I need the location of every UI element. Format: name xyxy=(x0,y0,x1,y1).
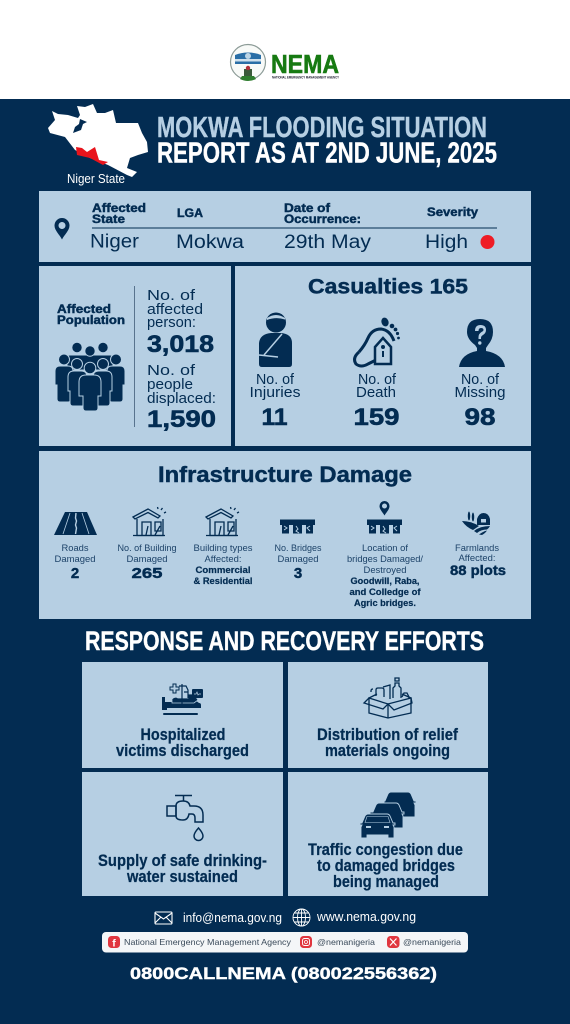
icon: crowd xyxy=(55,342,125,411)
missing label: No. of xyxy=(461,372,500,388)
farmlands text xyxy=(450,543,506,578)
panel: safe drinking water xyxy=(82,772,283,896)
infrastructure heading: Infrastructure Damage xyxy=(158,462,412,487)
bridges text: 3 xyxy=(294,565,302,582)
injuries number: 11 xyxy=(262,404,288,431)
displaced number: 1,590 xyxy=(147,406,216,433)
bridge location text: Agric bridges. xyxy=(354,598,416,608)
column headers: Affected xyxy=(92,203,146,215)
panel: relief materials xyxy=(288,662,488,768)
bridges text: Damaged xyxy=(278,554,318,564)
icon: relief box xyxy=(364,678,412,718)
panel: hospitalized victims xyxy=(82,662,283,768)
relief text xyxy=(317,725,458,760)
contacts row xyxy=(155,909,416,926)
affected persons number: 3,018 xyxy=(147,331,214,358)
building types text: & Residential xyxy=(194,576,252,586)
missing number: 98 xyxy=(464,404,496,431)
affected persons label: No. of xyxy=(147,287,196,304)
column headers xyxy=(92,203,479,226)
column headers: Severity xyxy=(427,207,479,219)
buildings text: 265 xyxy=(132,565,162,582)
icon: envelope xyxy=(155,912,172,924)
affected persons label: person: xyxy=(147,314,196,331)
panel: traffic congestion xyxy=(288,772,488,896)
traffic text: Traffic congestion due xyxy=(308,840,463,859)
injuries label: No. of xyxy=(256,372,295,388)
traffic text: being managed xyxy=(333,872,439,891)
email: info@nema.gov.ng xyxy=(183,911,282,925)
instagram handle: @nemanigeria xyxy=(317,937,375,947)
column headers: State xyxy=(92,214,125,226)
affected persons label: affected xyxy=(147,301,203,318)
drinking water text: water sustained xyxy=(126,867,238,886)
displaced label xyxy=(147,362,216,407)
farmlands text: Farmlands xyxy=(455,543,499,553)
divider xyxy=(134,286,135,427)
displaced label: displaced: xyxy=(147,390,216,407)
icon: X xyxy=(387,936,400,948)
buildings text: No. of Building xyxy=(118,543,176,553)
affected persons label xyxy=(147,287,203,331)
affected population heading xyxy=(57,304,125,327)
displaced label: No. of xyxy=(147,362,196,379)
icon: water tap xyxy=(167,796,203,841)
icon: damaged building type xyxy=(206,507,239,536)
column values: Mokwa xyxy=(176,232,244,253)
icon: missing person xyxy=(459,319,505,367)
missing label: Missing xyxy=(454,385,506,401)
website: www.nema.gov.ng xyxy=(316,910,416,924)
icon: cars in traffic xyxy=(360,792,416,838)
icon: hospital bed xyxy=(162,684,203,715)
building types text: Building types xyxy=(194,543,253,553)
hospitalized text: Hospitalized xyxy=(140,725,226,744)
icon: damaged building xyxy=(133,507,166,536)
column headers: Date of xyxy=(284,203,330,215)
death label xyxy=(356,372,397,401)
NEMA logo xyxy=(230,44,339,81)
column headers: LGA xyxy=(177,208,203,220)
map label: Niger State xyxy=(67,172,125,186)
logo emblem xyxy=(230,44,266,81)
injuries label: Injuries xyxy=(250,385,300,401)
roads text xyxy=(54,543,96,582)
bridge location text: bridges Damaged/ xyxy=(347,554,423,564)
traffic text xyxy=(308,840,463,891)
injuries label xyxy=(250,372,300,401)
roads text: Roads xyxy=(62,543,89,553)
icon: facebook: f xyxy=(112,938,116,950)
hospitalized text xyxy=(116,725,249,760)
icon: globe xyxy=(293,909,310,926)
header rule xyxy=(92,228,497,229)
social media bar xyxy=(102,932,468,952)
panel: infrastructure damage xyxy=(39,451,531,619)
phone hotline: 0800CALLNEMA (080022556362) xyxy=(130,964,437,983)
panel: incident summary xyxy=(39,191,531,262)
agency small line: NATIONAL EMERGENCY MANAGEMENT AGENCY xyxy=(272,76,339,80)
icon: instagram xyxy=(300,936,312,948)
building types text: Commercial xyxy=(196,565,250,575)
X handle: @nemanigeria xyxy=(403,937,461,947)
icon: injured person xyxy=(259,312,292,367)
relief text: Distribution of relief xyxy=(317,725,458,744)
icon: damaged road xyxy=(54,512,97,535)
panel: casualties xyxy=(235,266,531,446)
icon: bridge location pin xyxy=(367,501,402,534)
hospitalized text: victims discharged xyxy=(116,741,249,760)
drinking water text: Supply of safe drinking- xyxy=(98,851,267,870)
column values: 29th May xyxy=(284,232,372,253)
column headers: Occurrence: xyxy=(284,214,361,226)
column values: Niger xyxy=(90,232,140,252)
bridges text: No. Bridges xyxy=(274,543,322,553)
affected population heading: Affected xyxy=(57,304,111,316)
NEMA wordmark: NEMA xyxy=(271,49,339,79)
affected population heading: Population xyxy=(57,315,125,327)
red Mokwa area xyxy=(76,147,108,165)
column values: High xyxy=(425,232,468,253)
roads text: 2 xyxy=(71,565,79,582)
traffic text: to damaged bridges xyxy=(317,856,455,875)
facebook name: National Emergency Management Agency xyxy=(124,937,292,947)
column values xyxy=(90,232,468,253)
icon: broken bridge xyxy=(280,520,315,534)
bridge location text: Goodwill, Raba, xyxy=(350,576,420,586)
drinking water text xyxy=(98,851,267,886)
roads text: Damaged xyxy=(54,554,96,564)
casualties heading: Casualties 165 xyxy=(308,276,468,298)
death label: Death xyxy=(356,385,396,401)
farmlands text: 88 plots xyxy=(450,562,506,578)
bridge location text: Location of xyxy=(362,543,408,553)
icon: footprint with tag xyxy=(355,317,400,366)
bridge location text: and Colledge of xyxy=(350,587,422,597)
death number: 159 xyxy=(354,404,400,431)
severity red dot xyxy=(480,235,494,249)
missing label xyxy=(454,372,506,401)
bridge location text xyxy=(347,543,423,608)
icon: farmland xyxy=(462,512,490,535)
bridges text xyxy=(274,543,322,582)
death label: No. of xyxy=(358,372,397,388)
buildings text xyxy=(118,543,176,582)
relief text: materials ongoing xyxy=(325,741,450,760)
bridge location text: Destroyed xyxy=(364,565,406,575)
building types text: Affected: xyxy=(204,554,242,564)
icon: facebook xyxy=(108,936,120,950)
white header band xyxy=(0,0,570,99)
farmlands text: Affected: xyxy=(458,553,496,563)
map: Niger State xyxy=(48,104,148,186)
icon: location pin xyxy=(54,218,70,240)
panel: affected population xyxy=(39,266,231,446)
displaced label: people xyxy=(147,376,193,393)
building types text xyxy=(194,543,253,586)
buildings text: Damaged xyxy=(126,554,168,564)
title xyxy=(157,112,497,170)
